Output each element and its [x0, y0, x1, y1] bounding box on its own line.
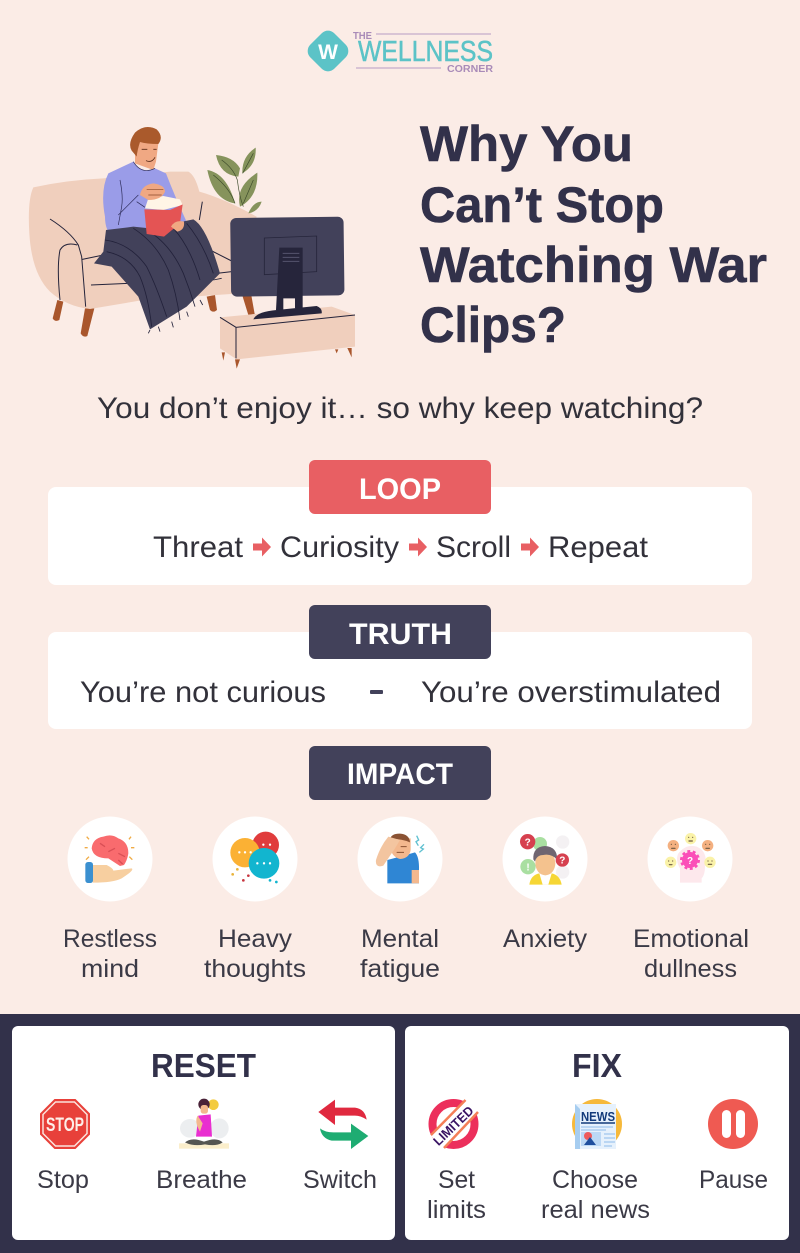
heading: fix: FIX: [572, 1047, 622, 1084]
icon: stop sign: STOP: [46, 1115, 84, 1136]
illustration: man watching TV on a sofa: [29, 127, 355, 369]
icon: brain on hand: [85, 835, 134, 883]
panel: fix: real news: [541, 1196, 650, 1224]
icon: pause button: [708, 1099, 758, 1149]
impact: heavy thoughts: thoughts: [204, 955, 306, 983]
icon: logo diamond: [304, 27, 352, 75]
impact: heavy thoughts: Heavy: [218, 925, 293, 953]
icon: head with gear and emotions: ?: [687, 856, 693, 867]
panel: reset: Switch: [303, 1166, 377, 1194]
icon: logo diamond: W: [318, 41, 338, 64]
panel: fix: limits: [427, 1196, 486, 1224]
panel: fix: Choose: [552, 1166, 638, 1194]
icon: anxious person: [520, 834, 569, 885]
TV: [230, 217, 344, 319]
plant: [207, 148, 262, 213]
icon: anxious person: ?: [559, 856, 565, 867]
panel: truth: [48, 605, 752, 729]
title: Can’t Stop: [420, 177, 664, 233]
title: Watching War: [420, 237, 767, 293]
icon: head with gear and emotions: [665, 833, 716, 883]
panel: loop: [48, 460, 752, 585]
badge: impact: [309, 746, 491, 800]
footer band: [0, 1014, 800, 1253]
panel: reset: Stop: [37, 1166, 89, 1194]
panel: truth: You’re overstimulated: [421, 676, 721, 709]
TV stand: [220, 307, 355, 369]
icon: anxious person: !: [526, 862, 530, 873]
badge: truth: [309, 605, 491, 659]
badge: loop: LOOP: [359, 473, 441, 506]
dash: [370, 690, 383, 694]
arrow: [253, 538, 271, 556]
badge: loop: [309, 460, 491, 514]
impact: mental fatigue: [358, 816, 442, 983]
icon: newspaper: NEWS: [581, 1109, 615, 1124]
panel: loop: Threat: [153, 531, 244, 564]
badge: impact: IMPACT: [347, 758, 453, 791]
impact: mental fatigue: Mental: [361, 925, 439, 953]
subtitle: You don’t enjoy it… so why keep watching?: [97, 392, 703, 425]
logo: The Wellness Corner: THE: [353, 31, 372, 42]
popcorn box and hands: [140, 183, 184, 237]
panel: truth: You’re not curious: [80, 676, 326, 709]
striped blanket: [94, 219, 222, 333]
logo: The Wellness Corner: CORNER: [447, 64, 494, 75]
badge: truth: TRUTH: [349, 618, 452, 651]
panel: fix: Pause: [699, 1166, 768, 1194]
panel: reset: Breathe: [156, 1166, 247, 1194]
icon: stop sign: [40, 1099, 90, 1149]
title: Why You: [420, 116, 633, 172]
icon: tired man: [376, 834, 424, 883]
impact: anxiety: [502, 816, 588, 953]
title: Clips?: [420, 297, 566, 353]
impact: restless mind: Restless: [63, 925, 157, 953]
panel: fix: [405, 1026, 789, 1240]
heading: reset: RESET: [151, 1047, 256, 1084]
panel: loop: Scroll: [436, 531, 511, 564]
impact: restless mind: mind: [81, 955, 139, 983]
panel: reset: [12, 1026, 395, 1240]
impact: emotional dullness: Emotional: [633, 925, 749, 953]
icon: limited sign: LIMITED: [430, 1103, 477, 1149]
panel: fix: Set: [438, 1166, 475, 1194]
icon: anxious person: ?: [525, 837, 531, 848]
impact: mental fatigue: fatigue: [360, 955, 440, 983]
logo: The Wellness Corner: [304, 27, 494, 75]
arrow: [521, 538, 539, 556]
panel: loop: Curiosity: [280, 531, 399, 564]
icon: switch arrows: [318, 1100, 368, 1149]
impact: anxiety: Anxiety: [503, 925, 588, 953]
impact: emotional dullness: [633, 816, 749, 983]
man: [103, 127, 187, 237]
impact: restless mind: [63, 816, 157, 983]
arrow: [409, 538, 427, 556]
impact: heavy thoughts: [204, 816, 306, 983]
title: [420, 116, 767, 353]
panel: loop: Repeat: [548, 531, 649, 564]
impact: emotional dullness: dullness: [644, 955, 737, 983]
icon: newspaper: [572, 1099, 622, 1149]
icon: speech bubbles: [230, 832, 279, 882]
logo: The Wellness Corner: WELLNESS: [358, 36, 493, 68]
icon: meditating woman: [179, 1099, 229, 1149]
